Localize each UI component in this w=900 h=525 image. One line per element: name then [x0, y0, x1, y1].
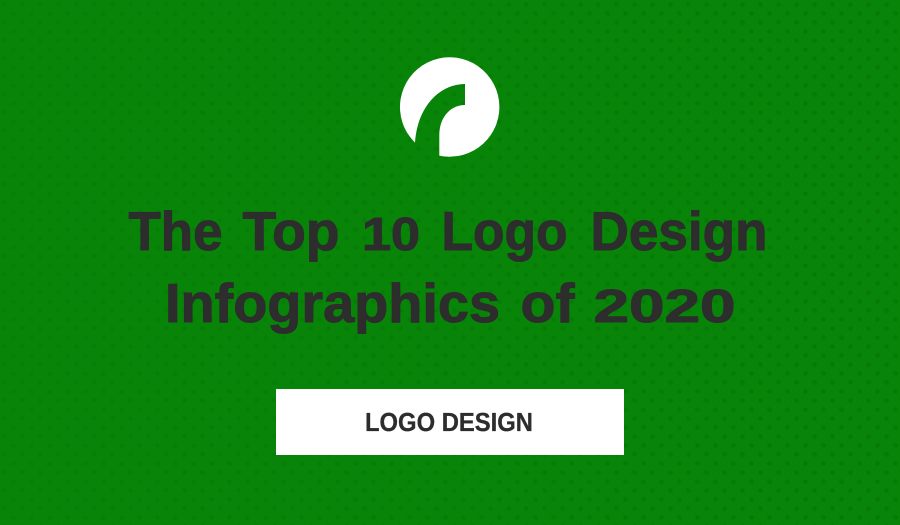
title	[128, 200, 768, 334]
icon: white circular logo with swoosh	[400, 57, 499, 157]
title: 2020	[594, 280, 736, 332]
category button: logo design	[276, 389, 624, 455]
title: Design	[590, 200, 768, 262]
title: Top	[242, 200, 340, 262]
title: The	[128, 200, 222, 262]
title: Logo	[442, 200, 568, 262]
title: 10	[362, 208, 420, 260]
category button: logo design: LOGO DESIGN	[365, 407, 533, 437]
title: Infographics	[165, 272, 500, 334]
title: of	[520, 272, 575, 334]
